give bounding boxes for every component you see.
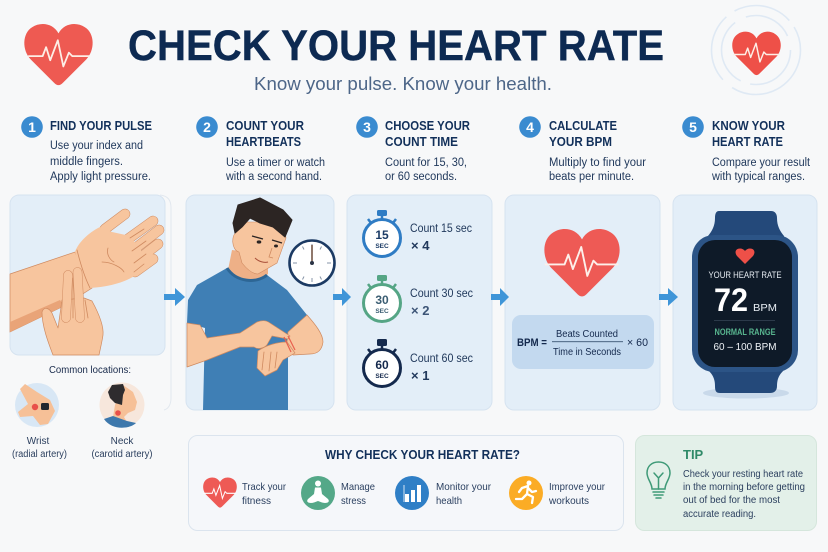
text: wrist label xyxy=(12,436,67,460)
stopwatch: 15 seconds: SEC xyxy=(375,243,389,250)
illustration: forearm shadow xyxy=(10,300,64,332)
text: tip body: out of bed for the most xyxy=(683,495,780,506)
step 3 heading and text: 3 xyxy=(363,119,371,135)
illustration: pressing fingers xyxy=(66,272,88,318)
step 5 heading and text: HEART RATE xyxy=(712,135,783,149)
stopwatch: 30 seconds: 30 xyxy=(375,293,389,307)
text: manage stress: stress xyxy=(341,495,366,507)
step 3 heading and text: CHOOSE YOUR xyxy=(385,119,470,133)
text: track fitness: fitness xyxy=(242,495,271,507)
panel: calculate your bpm xyxy=(505,195,660,410)
text: tip body: accurate reading. xyxy=(683,509,756,520)
illustration: palm creases xyxy=(77,229,146,288)
arrow 1 xyxy=(164,288,185,306)
subtitle: Know your pulse. Know your health. xyxy=(254,73,552,94)
formula box: × 60 xyxy=(627,337,648,349)
text: tip body xyxy=(683,469,805,520)
step 5 heading and text: 5 xyxy=(689,119,697,135)
step 1 heading and text xyxy=(21,116,152,183)
illustration: fist xyxy=(257,342,295,376)
text: normal range: NORMAL RANGE xyxy=(714,327,776,337)
stopwatch: 30 seconds xyxy=(364,275,400,322)
step 1 heading and text: Use your index and xyxy=(50,140,143,152)
stopwatch: 15 seconds xyxy=(364,210,400,256)
panel: find your pulse xyxy=(10,195,171,410)
text: monitor health xyxy=(436,481,491,507)
step 3 heading and text: or 60 seconds. xyxy=(385,171,457,183)
icon: light bulb xyxy=(647,462,670,498)
arrow 3 xyxy=(491,288,509,306)
panel: tip xyxy=(636,436,816,530)
text: 72 bpm: 72 xyxy=(714,282,748,318)
step 3 heading and text xyxy=(356,116,470,183)
step 4 heading and text xyxy=(519,116,646,183)
step 2 heading and text: with a second hand. xyxy=(225,171,322,183)
step 4 heading and text: Multiply to find your xyxy=(549,157,646,169)
icon: wall clock xyxy=(290,240,334,286)
step 2 heading and text: 2 xyxy=(203,119,211,135)
illustration: watch screen xyxy=(698,240,792,367)
text: wrist label: (radial artery) xyxy=(12,449,67,460)
illustration: open hand fingers xyxy=(105,214,159,272)
icon: large heart xyxy=(544,229,620,296)
text: manage stress xyxy=(341,481,375,507)
step 1 heading and text: Apply light pressure. xyxy=(50,171,151,183)
text: count 30: × 2 xyxy=(411,303,429,318)
text: your heart rate: YOUR HEART RATE xyxy=(708,270,782,280)
step 5 heading and text: Compare your result xyxy=(712,157,811,169)
stopwatch: 15 seconds: 15 xyxy=(375,228,389,242)
text: count 60 xyxy=(410,353,473,383)
icon: wrist location xyxy=(15,383,59,427)
step 4 heading and text: YOUR BPM xyxy=(549,135,612,149)
text: neck label: (carotid artery) xyxy=(92,449,152,460)
illustration: hair xyxy=(233,198,292,237)
arrow 4 xyxy=(659,288,678,306)
formula box xyxy=(512,315,654,369)
formula box: Time in Seconds xyxy=(553,347,621,358)
icon: left heart with pulse xyxy=(24,24,93,85)
step 1 heading and text: 1 xyxy=(28,119,36,135)
icon: neck location xyxy=(100,382,144,428)
text: 72 bpm: BPM xyxy=(753,302,777,314)
step 4 heading and text: beats per minute. xyxy=(549,171,634,183)
step 5 heading and text: KNOW YOUR xyxy=(712,119,785,133)
illustration: watch shadow xyxy=(703,388,789,398)
icon: watch heart xyxy=(736,248,754,264)
text: count 60: × 1 xyxy=(411,368,429,383)
step 5 heading and text: with typical ranges. xyxy=(711,171,805,183)
stopwatch: 60 seconds: 60 xyxy=(375,358,389,372)
text: track fitness xyxy=(242,481,286,507)
illustration: t-shirt xyxy=(187,268,307,410)
panel: why check your heart rate xyxy=(188,436,624,530)
text: count 15: × 4 xyxy=(411,238,430,253)
icon: runner xyxy=(509,476,543,510)
text: monitor health: Monitor your xyxy=(436,481,491,493)
step 4 heading and text: 4 xyxy=(526,119,534,135)
text: tip body: in the morning before getting xyxy=(683,482,805,493)
icon: right heart with rings xyxy=(712,6,800,94)
text: count 30 xyxy=(410,288,473,318)
illustration: shirt collar xyxy=(227,268,267,280)
text: count 15 xyxy=(410,223,472,253)
step 3 heading and text: COUNT TIME xyxy=(385,135,458,149)
illustration: face xyxy=(252,236,282,262)
panel: choose your count time xyxy=(347,195,492,410)
text: wrist label: Wrist xyxy=(27,436,50,447)
text: common locations: Common locations: xyxy=(49,365,131,376)
step 2 heading and text: HEARTBEATS xyxy=(226,135,301,149)
title: CHECK YOUR HEART RATE xyxy=(128,23,664,70)
step 2 heading and text: Use a timer or watch xyxy=(226,157,325,169)
step 1 heading and text: FIND YOUR PULSE xyxy=(50,119,152,133)
illustration: palm xyxy=(75,227,143,288)
text: count 30: Count 30 sec xyxy=(410,288,473,300)
text: monitor health: health xyxy=(436,495,462,507)
text: neck label xyxy=(92,436,152,460)
step 4 heading and text: CALCULATE xyxy=(549,119,617,133)
illustration: pressing hand xyxy=(42,298,103,355)
illustration: watch strap xyxy=(708,211,784,393)
text: count 60: Count 60 sec xyxy=(410,353,473,365)
illustration: right arm and elbow xyxy=(287,315,323,355)
icon: heart xyxy=(203,477,237,508)
heading: tip: TIP xyxy=(683,447,704,462)
text: range value: 60 – 100 BPM xyxy=(714,341,776,353)
text: count 15: Count 15 sec xyxy=(410,223,472,235)
formula box: BPM = xyxy=(517,337,547,349)
text: 72 bpm xyxy=(714,282,777,318)
step 2 heading and text xyxy=(196,116,325,183)
text: improve workouts: workouts xyxy=(548,495,589,507)
text: track fitness: Track your xyxy=(242,481,286,493)
illustration: pointing arm xyxy=(187,321,290,367)
illustration: fist finger lines xyxy=(262,352,277,371)
text: tip body: Check your resting heart rate xyxy=(683,469,803,480)
stopwatch: 60 seconds: SEC xyxy=(375,373,389,380)
text: improve workouts: Improve your xyxy=(549,481,605,493)
formula box: Beats Counted xyxy=(556,329,618,340)
panel: know your heart rate xyxy=(673,195,817,410)
text: manage stress: Manage xyxy=(341,481,375,493)
illustration: pulse highlight xyxy=(284,336,295,352)
illustration: neck xyxy=(228,250,268,281)
panel: count your heartbeats xyxy=(186,195,334,410)
stopwatch: 30 seconds: SEC xyxy=(375,308,389,315)
illustration: head xyxy=(233,222,286,274)
arrow 2 xyxy=(333,288,351,306)
text: improve workouts xyxy=(548,481,605,507)
step 1 heading and text: middle fingers. xyxy=(50,156,123,168)
stopwatch: 60 seconds xyxy=(364,339,400,386)
illustration: watch body xyxy=(692,235,798,372)
step 5 heading and text xyxy=(682,116,811,183)
step 3 heading and text: Count for 15, 30, xyxy=(385,157,467,169)
icon: meditation xyxy=(301,476,335,510)
icon: chart xyxy=(395,476,429,510)
text: neck label: Neck xyxy=(111,436,134,447)
divider in watch xyxy=(714,320,775,321)
heading: WHY CHECK YOUR HEART RATE? xyxy=(325,447,520,462)
illustration: forearm xyxy=(10,252,92,332)
step 2 heading and text: COUNT YOUR xyxy=(226,119,304,133)
